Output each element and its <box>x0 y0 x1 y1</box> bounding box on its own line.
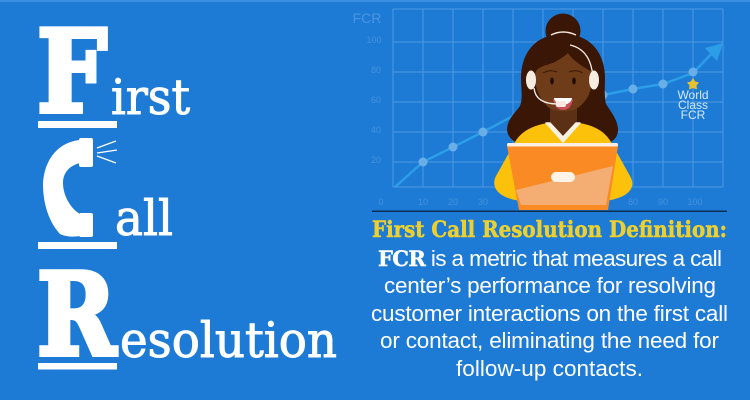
hair and bun <box>507 14 618 144</box>
trend line with arrow <box>395 43 723 187</box>
chart axis labels: 80 <box>371 65 381 75</box>
chart axis labels <box>353 10 703 207</box>
divider line <box>372 210 727 212</box>
world class FCR label: Class <box>678 98 708 112</box>
smile <box>553 98 573 110</box>
line chart background <box>353 9 723 207</box>
chart axis labels: 100 <box>366 35 382 45</box>
definition body text: follow-up contacts. <box>456 356 643 381</box>
definition body text: FCR is a metric that measures a call <box>378 246 722 271</box>
phone icon used as letter C <box>43 138 117 237</box>
word Call: all <box>115 190 173 247</box>
hair tie <box>551 32 576 35</box>
title letter F with word First <box>37 6 190 138</box>
title letter F with word First: F <box>37 6 107 138</box>
chart axis labels: 30 <box>478 197 488 207</box>
chart axis labels: 20 <box>448 197 458 207</box>
world class FCR label: World <box>677 88 709 102</box>
chart axis labels: FCR <box>353 10 381 26</box>
eyes and brows <box>543 71 583 84</box>
shirt collar <box>546 123 580 142</box>
definition body text: center’s performance for resolving <box>384 273 716 298</box>
chart axis labels: 60 <box>371 95 381 105</box>
headset <box>526 45 599 107</box>
chart axis labels: 80 <box>628 197 638 207</box>
chart axis labels: 0 <box>378 197 384 207</box>
title letter R with word Resolution <box>37 248 337 382</box>
neck <box>550 100 577 140</box>
face <box>535 53 592 111</box>
chart axis labels: 20 <box>371 155 381 165</box>
star icon <box>687 78 699 90</box>
world class FCR label: FCR <box>681 108 706 122</box>
definition body text: or contact, eliminating the need for <box>380 328 720 353</box>
world class FCR label <box>677 88 709 122</box>
laptop <box>507 143 618 210</box>
chart axis labels: 100 <box>687 197 703 207</box>
title letter F with word First: irst <box>111 69 190 126</box>
title letter R with word Resolution: R <box>37 248 117 382</box>
definition body text: customer interactions on the first call <box>371 301 728 326</box>
chart axis labels: 90 <box>658 197 668 207</box>
illustration: call center agent <box>494 14 632 210</box>
word Call <box>38 190 173 249</box>
chart axis labels: 40 <box>371 125 381 135</box>
title letter R with word Resolution: esolution <box>120 312 337 369</box>
definition body text <box>371 246 728 381</box>
yellow shirt <box>494 123 632 201</box>
chart axis labels: 10 <box>418 197 428 207</box>
